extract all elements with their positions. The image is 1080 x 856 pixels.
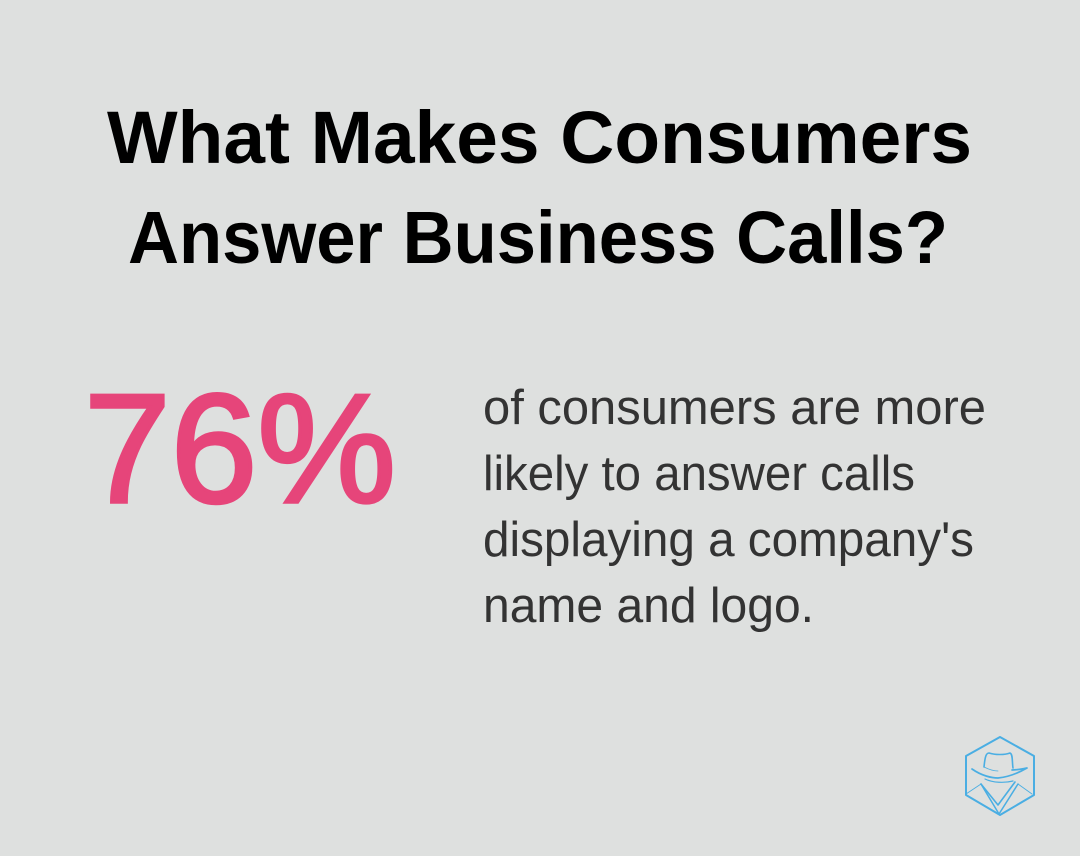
description text [483,381,986,633]
description text: of consumers are more [483,381,986,435]
title: Answer Business Calls? [128,196,948,279]
big statistic: 76%: 76% [84,362,396,535]
description text: likely to answer calls [483,447,915,501]
description text: name and logo. [483,579,814,633]
description text: displaying a company's [483,513,974,567]
icon: hexagon logo with hat and suit [966,737,1034,815]
title [107,96,972,279]
title: What Makes Consumers [107,96,972,179]
